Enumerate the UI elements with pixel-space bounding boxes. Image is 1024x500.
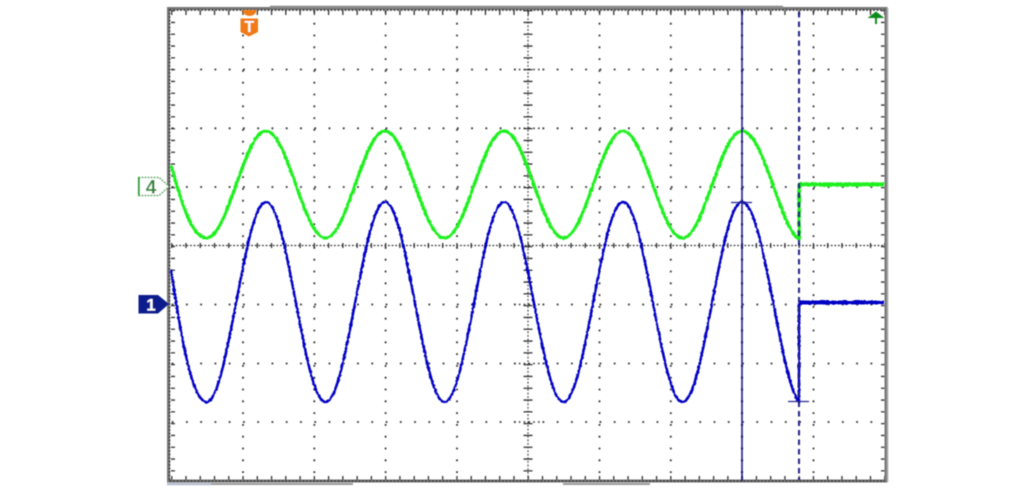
trigger marker T [240, 10, 258, 36]
dashed cursor [788, 12, 809, 480]
green waveform channel 4 [171, 131, 799, 239]
solid cursor [731, 9, 752, 481]
frame [167, 7, 888, 484]
channel 1 marker: 1 [146, 296, 156, 314]
green flat section noise band [799, 182, 884, 187]
channel 1 marker [138, 295, 169, 314]
blue waveform channel 1 [171, 202, 799, 402]
blue flat section noise band [799, 300, 884, 304]
channel 4 marker [138, 178, 169, 198]
trigger marker T: T [244, 19, 254, 36]
grid [171, 10, 885, 481]
oscilloscope screen [138, 7, 888, 484]
channel 4 marker: 4 [146, 178, 157, 198]
icon: trigger position arrow [868, 12, 884, 24]
